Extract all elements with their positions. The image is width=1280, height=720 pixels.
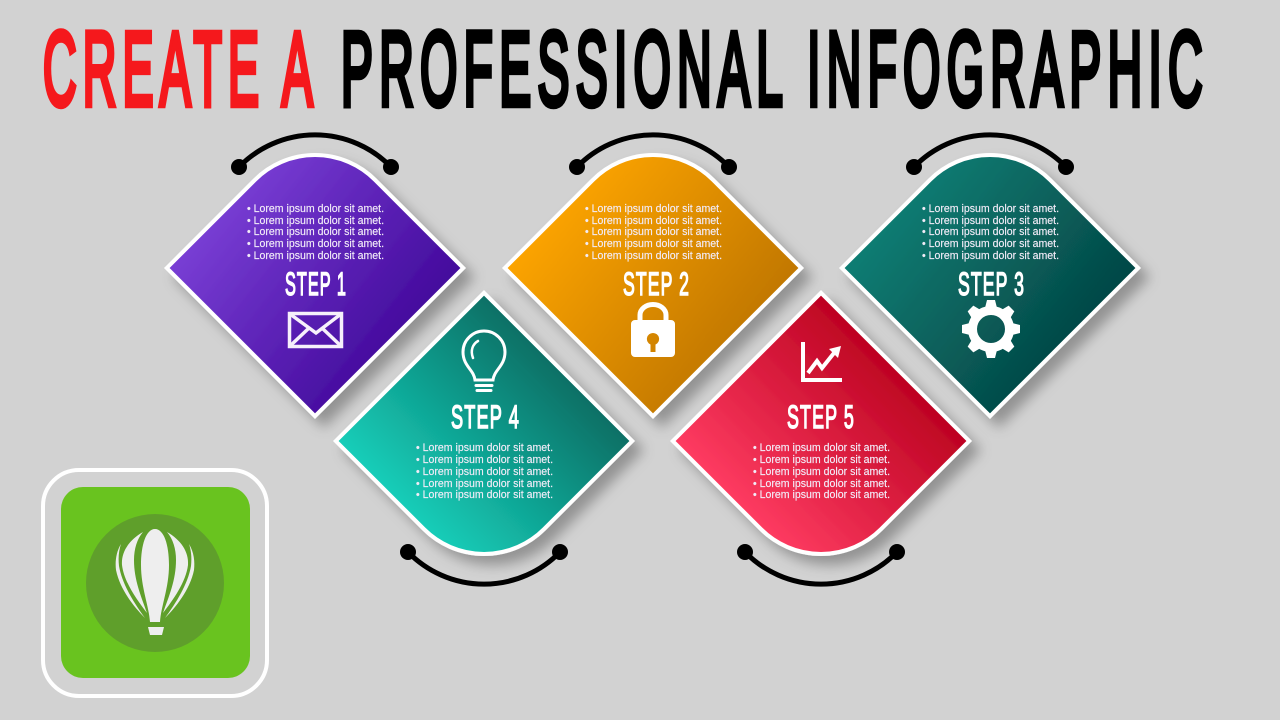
- panel: step 1: [167, 135, 463, 416]
- logo green tile: [61, 487, 250, 678]
- logo white frame: [43, 470, 267, 696]
- panel: step 3: [842, 135, 1138, 416]
- step 3 heading: STEP 3: [958, 266, 1025, 302]
- logo circle: [86, 514, 224, 652]
- step 4 connector arc: [400, 544, 568, 584]
- step 2 text block: • Lorem ipsum dolor sit amet.: [585, 250, 722, 262]
- step 5 text block: • Lorem ipsum dolor sit amet.: [753, 478, 890, 490]
- step 2 heading: STEP 2: [623, 266, 690, 302]
- step 1 text block: • Lorem ipsum dolor sit amet.: [247, 203, 384, 215]
- step 5 text block: • Lorem ipsum dolor sit amet.: [753, 454, 890, 466]
- step 1 heading: STEP 1: [285, 266, 347, 302]
- step 5 text block: [753, 442, 890, 501]
- icon: growth chart: [803, 342, 842, 380]
- step 2 diamond: [505, 155, 801, 416]
- step 5 text block: • Lorem ipsum dolor sit amet.: [753, 442, 890, 454]
- step 3 text block: • Lorem ipsum dolor sit amet.: [922, 215, 1059, 227]
- step 5 diamond: [673, 293, 969, 554]
- step 4 text block: • Lorem ipsum dolor sit amet.: [416, 454, 553, 466]
- step 4 diamond: [336, 293, 632, 554]
- title: CREATE A: [43, 11, 319, 128]
- step 1 text block: • Lorem ipsum dolor sit amet.: [247, 226, 384, 238]
- icon: padlock: [631, 304, 675, 357]
- step 2 connector arc: [569, 135, 737, 175]
- step 4 text block: • Lorem ipsum dolor sit amet.: [416, 466, 553, 478]
- step 2 text block: [585, 203, 722, 262]
- icon: hot air balloon: [116, 529, 194, 635]
- panel: step 4: [336, 293, 632, 584]
- step 5 connector arc: [737, 544, 905, 584]
- step 5 text block: • Lorem ipsum dolor sit amet.: [753, 489, 890, 501]
- step 1 text block: • Lorem ipsum dolor sit amet.: [247, 250, 384, 262]
- step 3 text block: • Lorem ipsum dolor sit amet.: [922, 226, 1059, 238]
- step 3 diamond: [842, 155, 1138, 416]
- icon: envelope: [290, 314, 342, 346]
- logo badge: [43, 470, 267, 696]
- icon: gear: [962, 300, 1020, 358]
- step 4 text block: • Lorem ipsum dolor sit amet.: [416, 442, 553, 454]
- step 4 text block: • Lorem ipsum dolor sit amet.: [416, 489, 553, 501]
- step 5 text block: • Lorem ipsum dolor sit amet.: [753, 466, 890, 478]
- step 2 text block: • Lorem ipsum dolor sit amet.: [585, 203, 722, 215]
- step 3 text block: • Lorem ipsum dolor sit amet.: [922, 238, 1059, 250]
- step 4 heading: STEP 4: [451, 399, 520, 435]
- step 2 text block: • Lorem ipsum dolor sit amet.: [585, 226, 722, 238]
- panel: step 5: [673, 293, 969, 584]
- step 1 text block: • Lorem ipsum dolor sit amet.: [247, 215, 384, 227]
- step 5 heading: STEP 5: [787, 399, 855, 435]
- step 4 text block: • Lorem ipsum dolor sit amet.: [416, 478, 553, 490]
- panel: step 2: [505, 135, 801, 416]
- icon: light bulb: [463, 331, 505, 390]
- step 1 connector arc: [231, 135, 399, 175]
- step 3 text block: • Lorem ipsum dolor sit amet.: [922, 203, 1059, 215]
- step 1 text block: • Lorem ipsum dolor sit amet.: [247, 238, 384, 250]
- step 3 text block: • Lorem ipsum dolor sit amet.: [922, 250, 1059, 262]
- step 2 text block: • Lorem ipsum dolor sit amet.: [585, 215, 722, 227]
- step 2 text block: • Lorem ipsum dolor sit amet.: [585, 238, 722, 250]
- step 1 text block: [247, 203, 384, 262]
- step 3 text block: [922, 203, 1059, 262]
- step 3 connector arc: [906, 135, 1074, 175]
- step 1 diamond: [167, 155, 463, 416]
- step 4 text block: [416, 442, 553, 501]
